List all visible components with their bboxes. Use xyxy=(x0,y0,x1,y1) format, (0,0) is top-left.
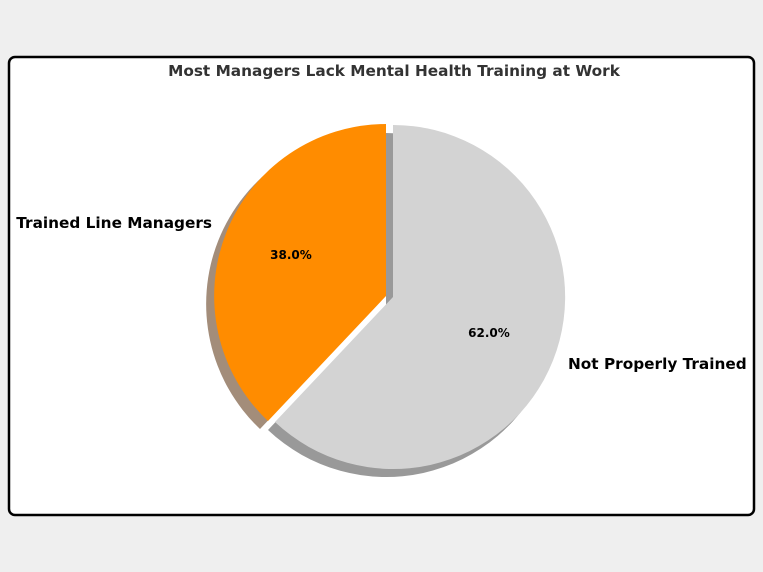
slice: trained line managers xyxy=(214,124,386,421)
slice: not properly trained xyxy=(275,125,565,469)
shadow: orange slice xyxy=(206,132,378,429)
title: Most Managers Lack Mental Health Training at Work xyxy=(168,62,621,80)
shadow: gray slice xyxy=(268,133,558,477)
label: not properly trained: Not Properly Trained xyxy=(568,355,747,373)
label: trained line managers: Trained Line Managers xyxy=(16,214,212,232)
percentage: 38.0%: 38.0% xyxy=(270,248,312,262)
panel: card xyxy=(9,57,754,515)
pie chart xyxy=(206,124,565,477)
percentage: 62.0%: 62.0% xyxy=(468,326,510,340)
